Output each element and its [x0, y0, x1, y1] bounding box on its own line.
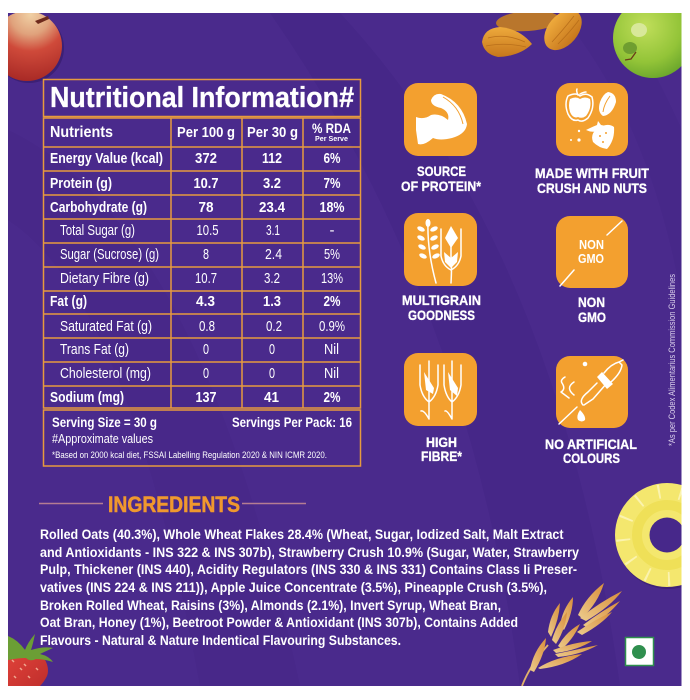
icon: non gmo badge: GMO	[578, 251, 604, 266]
icon: apple almond strawberry	[556, 83, 628, 156]
row: sodium: Sodium (mg)	[50, 389, 124, 406]
row: cholesterol: 0	[203, 365, 209, 382]
table footer	[52, 414, 352, 461]
row: saturated fat	[60, 320, 345, 334]
label: OF PROTEIN*	[401, 178, 481, 194]
feature: multigrain goodness	[402, 213, 481, 323]
table header: Per 100 g	[177, 124, 235, 141]
title box	[44, 80, 360, 116]
row: protein	[50, 177, 340, 191]
row: trans fat	[60, 343, 338, 357]
row: carbohydrate	[50, 201, 344, 215]
ingredients text: Flavours - Natural & Nature Indentical Flavouring Substances.	[40, 633, 401, 648]
row: saturated fat: Saturated Fat (g)	[60, 318, 152, 335]
row: sucrose: 2.4	[265, 246, 282, 263]
label	[402, 295, 480, 320]
icon: grains	[404, 213, 477, 286]
icon: dropper	[556, 356, 628, 428]
row: fat: 1.3	[263, 293, 281, 310]
table header: Per 30 g	[247, 124, 298, 141]
table header: Per Serve	[315, 136, 348, 143]
vertical footnote: *As per Codex Alimentarius Commission Guidelines	[667, 274, 678, 446]
feature: high fibre	[404, 353, 477, 464]
label	[422, 437, 462, 462]
illustration: strawberry	[8, 634, 53, 686]
row: cholesterol: 0	[269, 365, 275, 382]
row: energy: 372	[195, 150, 217, 167]
icon: non gmo badge	[556, 216, 628, 288]
ingredients heading: INGREDIENTS	[108, 492, 240, 517]
row: energy	[50, 152, 340, 166]
label: MADE WITH FRUIT	[535, 165, 649, 181]
row: trans fat: Nil	[324, 341, 339, 358]
title: Nutritional Information#	[50, 82, 354, 114]
row: sucrose: 8	[203, 246, 209, 263]
row: cholesterol: Nil	[324, 365, 339, 382]
row: energy: 6%	[324, 150, 340, 167]
label: COLOURS	[563, 450, 620, 466]
row: total sugar: 3.1	[266, 222, 280, 239]
icon: non gmo badge: NON	[579, 237, 604, 252]
label: FIBRE*	[421, 448, 462, 464]
row: energy: 112	[262, 150, 282, 167]
table footer: Serving Size = 30 g	[52, 414, 157, 430]
row: protein: Protein (g)	[50, 175, 112, 192]
row: carbohydrate: Carbohydrate (g)	[50, 199, 147, 216]
row: saturated fat: 0.2	[266, 318, 282, 335]
row: sodium: 137	[196, 389, 216, 406]
label: GOODNESS	[408, 307, 475, 323]
label: MULTIGRAIN	[402, 292, 481, 308]
row: sucrose: 5%	[324, 246, 340, 263]
label: GMO	[578, 309, 606, 325]
label	[536, 168, 649, 194]
table footer: Servings Per Pack: 16	[232, 414, 352, 430]
row: cholesterol	[60, 367, 338, 381]
ingredients text: Rolled Oats (40.3%), Whole Wheat Flakes 28.4% (Wheat, Sugar, Iodized Salt, Malt Extract	[40, 527, 564, 542]
illustration: red apple	[8, 13, 64, 83]
row: fat	[50, 295, 340, 309]
feature: source of protein	[401, 83, 481, 194]
table footer: *Based on 2000 kcal diet, FSSAI Labelling Regulation 2020 & NIN ICMR 2020.	[52, 450, 327, 461]
ingredients text: Broken Rolled Wheat, Raisins (3%), Almonds (2.1%), Invert Syrup, Wheat Bran,	[40, 598, 501, 613]
row: protein: 3.2	[263, 175, 281, 192]
table header: % RDA	[312, 120, 351, 136]
nutrition table	[43, 80, 361, 466]
icon: flexed arm	[404, 83, 477, 156]
icon: wheat ears	[404, 353, 477, 426]
row: carbohydrate: 23.4	[259, 199, 286, 216]
row: fat: 2%	[324, 293, 340, 310]
row: cholesterol: Cholesterol (mg)	[60, 365, 151, 382]
row: sodium: 2%	[324, 389, 340, 406]
illustration: oat stalk	[522, 583, 622, 686]
label	[545, 436, 637, 466]
row: trans fat: 0	[203, 341, 209, 358]
row: dietary fibre: 3.2	[264, 270, 280, 287]
row: carbohydrate: 18%	[320, 199, 344, 216]
ingredients text	[40, 527, 579, 648]
row: protein: 10.7	[194, 175, 218, 192]
row: total sugar: -	[330, 222, 334, 239]
ingredients text: and Antioxidants - INS 322 & INS 307b), Strawberry Crush 10.9% (Sugar, Water, Strawberry	[40, 545, 579, 560]
row: trans fat: Trans Fat (g)	[60, 341, 129, 358]
row: dietary fibre	[61, 272, 343, 286]
feature: non gmo	[556, 216, 628, 325]
row: sodium: 41	[264, 389, 279, 406]
illustration: almonds	[482, 13, 582, 57]
table footer: #Approximate values	[52, 431, 153, 446]
illustration: green apple	[613, 13, 682, 78]
label: CRUSH AND NUTS	[537, 180, 647, 196]
row: sucrose	[60, 248, 340, 262]
label	[578, 297, 606, 322]
icon: vegetarian mark	[626, 638, 654, 666]
row: carbohydrate: 78	[198, 199, 214, 216]
row: dietary fibre: Dietary Fibre (g)	[60, 270, 149, 287]
row: saturated fat: 0.9%	[319, 318, 345, 335]
label: NON	[578, 294, 605, 310]
row: protein: 7%	[324, 175, 340, 192]
label: HIGH	[426, 434, 457, 450]
row: fat: 4.3	[196, 293, 215, 310]
row: total sugar	[60, 224, 334, 238]
feature: fruit crush and nuts	[535, 83, 649, 196]
row: total sugar: 10.5	[196, 222, 218, 239]
ingredients text: Pulp, Thickener (INS 440), Acidity Regulators (INS 330 & INS 331) Contains Class Ii Preser-	[40, 562, 577, 577]
row: saturated fat: 0.8	[199, 318, 215, 335]
feature: no artificial colours	[545, 356, 637, 466]
row: sucrose: Sugar (Sucrose) (g)	[60, 246, 159, 263]
label	[401, 166, 482, 192]
illustration: pineapple ring	[615, 483, 682, 589]
row: total sugar: Total Sugar (g)	[60, 222, 135, 239]
ingredients text: Oat Bran, Honey (1%), Beetroot Powder & Antioxidant (INS 307b), Contains Added	[40, 615, 518, 630]
ingredients text: vatives (INS 224 & INS 211)), Apple Juice Concentrate (3.5%), Pineapple Crush (3.5%),	[40, 580, 547, 595]
table header: Nutrients	[50, 124, 113, 141]
table grid	[43, 118, 361, 466]
row: dietary fibre: 10.7	[195, 270, 217, 287]
row: energy: Energy Value (kcal)	[50, 150, 163, 167]
label: SOURCE	[417, 163, 466, 179]
label: NO ARTIFICIAL	[545, 436, 637, 452]
row: dietary fibre: 13%	[321, 270, 343, 287]
row: sodium	[50, 391, 340, 405]
row: trans fat: 0	[269, 341, 275, 358]
row: fat: Fat (g)	[50, 293, 87, 310]
table header	[50, 124, 351, 141]
